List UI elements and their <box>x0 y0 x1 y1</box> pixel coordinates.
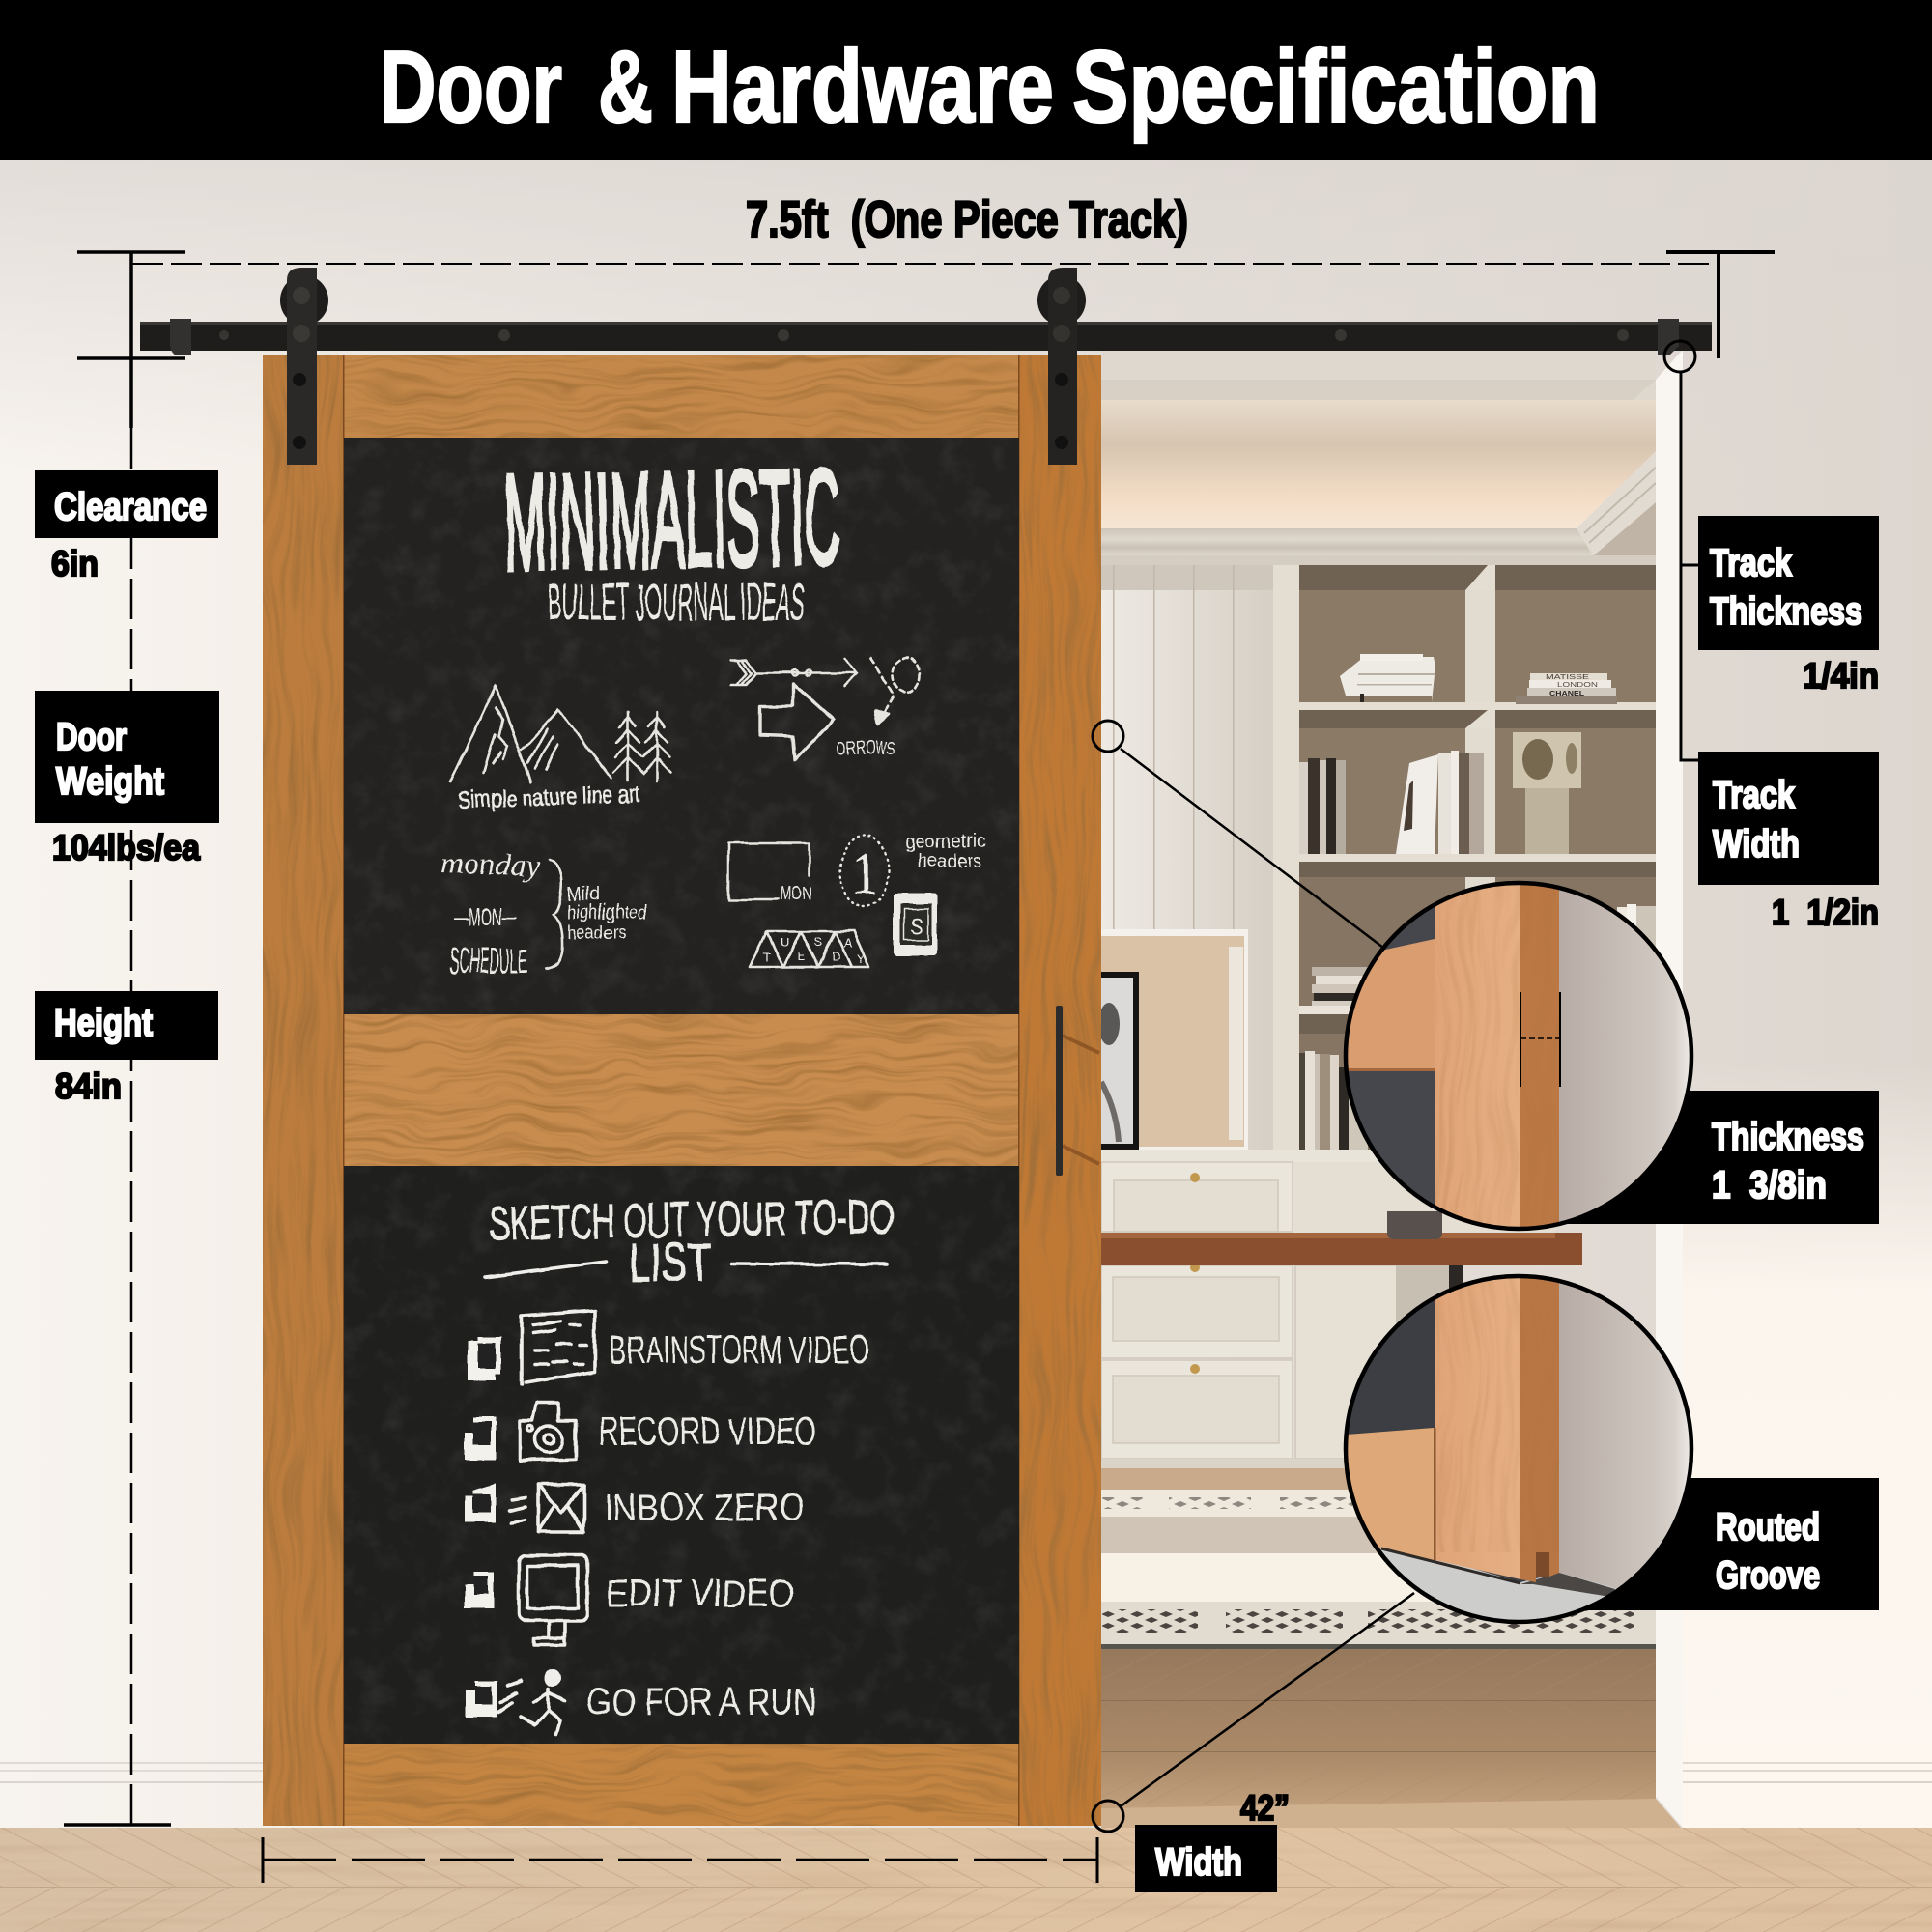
stone sculpture <box>1513 732 1581 854</box>
track end stops <box>170 319 1679 355</box>
books top right stack with spine text: CHANEL <box>1549 689 1584 697</box>
track thickness label: Track <box>1710 542 1793 584</box>
upper chalk drawings: MINIMALISTIC <box>503 440 841 598</box>
chalk geometric headers: S <box>910 914 923 940</box>
magnified detail: routed groove <box>1343 1273 1700 1628</box>
lower chalkboard <box>344 1166 1019 1744</box>
top rail <box>344 355 1019 438</box>
chalk geometric headers: 1 <box>851 841 878 907</box>
books top right stack with spine text: MATISSE <box>1546 674 1589 681</box>
to-do row inbox <box>465 1484 804 1532</box>
middle rail <box>344 1014 1019 1166</box>
door thickness label: 1 3/8in <box>1712 1164 1827 1207</box>
books top right stack with spine text <box>1516 673 1617 704</box>
track length dimension <box>132 191 1775 358</box>
chalk geometric headers: geometric <box>905 831 985 852</box>
clearance and height dimension lines <box>64 252 185 1825</box>
to-do row record: RECORD VIDEO <box>598 1410 816 1453</box>
lower chalk drawings <box>465 1189 895 1734</box>
to-do row brainstorm <box>468 1310 869 1384</box>
upper chalkboard <box>344 438 1019 1014</box>
upper chalk drawings: BULLET JOURNAL IDEAS <box>548 572 805 632</box>
floor <box>0 1828 1932 1932</box>
title <box>380 30 1600 144</box>
barn door <box>263 355 1101 1826</box>
track thickness label: 1/4in <box>1803 656 1879 696</box>
chalk geometric headers: D <box>832 950 840 964</box>
height label <box>35 991 218 1106</box>
chalk geometric headers: T <box>763 950 771 964</box>
chalk geometric headers: S <box>814 935 823 950</box>
door weight label <box>35 691 219 867</box>
header bar <box>0 0 1932 160</box>
title: Door <box>380 30 562 144</box>
chalk geometric headers: Y <box>857 952 866 966</box>
routed groove label <box>1565 1478 1879 1610</box>
to-do row run <box>466 1669 816 1734</box>
chalk geometric headers <box>729 831 985 967</box>
barn door track <box>140 268 1712 465</box>
door width label: 42” <box>1240 1788 1290 1828</box>
to-do row record <box>465 1403 816 1461</box>
desk and cup <box>1101 1211 1582 1265</box>
door handle <box>1056 1006 1099 1176</box>
door jamb <box>1656 350 1683 1828</box>
books top right stack with spine text: LONDON <box>1557 682 1598 689</box>
door frame right stile <box>1019 355 1101 1826</box>
clearance label: Clearance <box>54 486 207 528</box>
title: & <box>598 30 653 144</box>
routed groove label: Groove <box>1716 1554 1820 1597</box>
chalk weekday styles: monday <box>440 844 541 883</box>
clearance label <box>35 470 218 583</box>
door width label: Width <box>1155 1841 1242 1884</box>
chalk weekday styles: Mild <box>567 884 599 905</box>
height label: Height <box>54 1002 153 1044</box>
chalk weekday styles: SCHEDULE <box>449 941 527 980</box>
upright books row two centre <box>1396 751 1484 854</box>
door thickness label: Thickness <box>1712 1116 1864 1158</box>
track width label: Width <box>1713 823 1800 866</box>
track width label: Track <box>1713 774 1796 816</box>
height label: 84in <box>55 1066 122 1106</box>
chalk geometric headers: MON <box>781 883 811 905</box>
magnified detail: door thickness <box>1343 879 1695 1232</box>
chalk weekday styles: headers <box>567 923 626 944</box>
crown moulding <box>1101 451 1656 565</box>
chalk heading list <box>484 1232 888 1293</box>
door thickness label <box>1546 1091 1879 1224</box>
track thickness label <box>1698 516 1879 696</box>
track thickness label: Thickness <box>1710 590 1862 633</box>
door width dimension <box>263 1837 1097 1883</box>
title: Hardware <box>671 30 1054 144</box>
chalk weekday styles: highlighted <box>567 902 647 923</box>
cabinets <box>1101 1150 1565 1459</box>
to-do row brainstorm: BRAINSTORM VIDEO <box>610 1329 869 1372</box>
books row four <box>1299 1051 1368 1151</box>
thickness measure marks <box>1520 992 1560 1087</box>
door weight label: Door <box>56 716 127 758</box>
door frame left stile <box>263 355 344 1826</box>
chalk geometric headers: U <box>780 935 788 950</box>
track length label: 7.5ft (One Piece Track) <box>746 191 1188 248</box>
chalk geometric headers: E <box>797 950 806 964</box>
door weight label: Weight <box>56 760 164 803</box>
track width label <box>1698 752 1879 932</box>
chalk caption arrows: ORROWS <box>837 738 895 759</box>
books top left stack <box>1340 654 1435 702</box>
to-do row inbox: INBOX ZERO <box>605 1487 804 1529</box>
chalk heading list: LIST <box>629 1232 711 1293</box>
routed groove label: Routed <box>1716 1506 1820 1548</box>
chalk caption nature: Simple nature line art <box>458 781 641 813</box>
right roller hanger <box>1037 268 1086 465</box>
bottom detail leader <box>1093 1593 1414 1832</box>
track callout leader <box>1664 341 1698 760</box>
chalk heading to-do: SKETCH OUT YOUR TO-DO <box>489 1189 895 1250</box>
room interior seen through opening <box>1098 350 1683 1828</box>
clearance label: 6in <box>51 544 99 583</box>
to-do row edit <box>465 1556 794 1644</box>
chalk mountains and trees <box>451 686 671 781</box>
door weight label: 104lbs/ea <box>52 828 200 867</box>
framed art <box>1098 929 1248 1150</box>
upper chalk drawings <box>440 440 985 980</box>
chalk geometric headers: headers <box>918 851 981 872</box>
to-do row run: GO FOR A RUN <box>586 1681 816 1723</box>
to-do row edit: EDIT VIDEO <box>606 1573 794 1615</box>
title: Specification <box>1072 30 1600 144</box>
upright books row two left <box>1299 758 1346 854</box>
chalk weekday styles: —MON— <box>454 904 517 930</box>
chalk geometric headers: A <box>844 935 853 950</box>
door width label <box>1135 1788 1290 1892</box>
room floor and rug <box>1101 1459 1681 1828</box>
tongue and groove wall panel <box>1101 565 1275 1170</box>
stacked books row three <box>1312 904 1656 1006</box>
bottom rail <box>344 1744 1019 1826</box>
left roller hanger <box>280 268 328 465</box>
chalk arrows <box>730 657 920 760</box>
top detail leader <box>1093 721 1383 948</box>
chalk weekday styles <box>440 844 647 980</box>
bookshelf <box>1273 565 1656 1164</box>
track width label: 1 1/2in <box>1772 893 1879 932</box>
